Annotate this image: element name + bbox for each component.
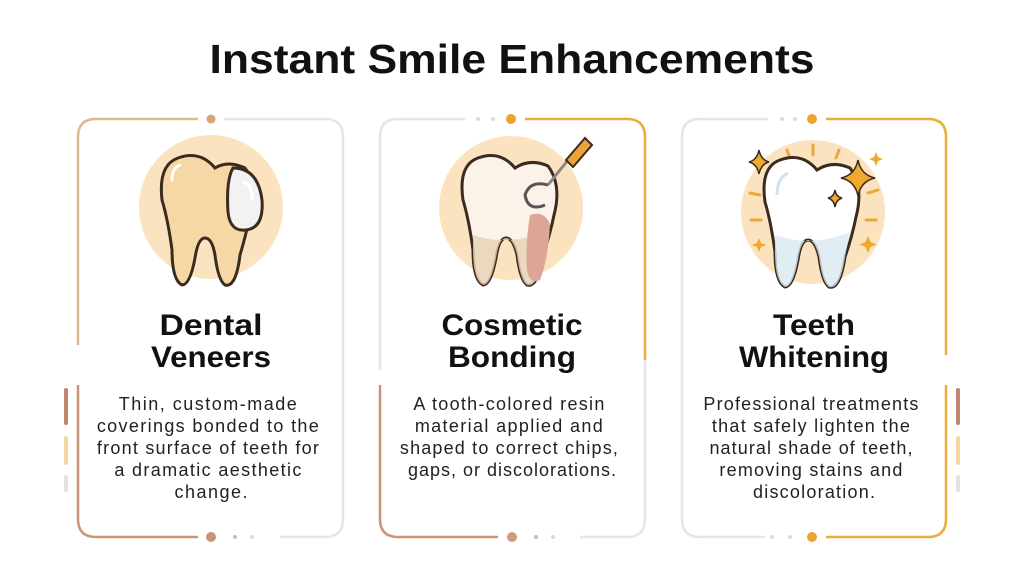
text block: bonding description: A tooth-colored resin (413, 394, 604, 414)
heading: teeth whitening: Teeth (773, 309, 855, 342)
text block: bonding description: material applied and (415, 416, 603, 436)
text block: whitening description: natural shade of teeth, (709, 438, 912, 458)
title: Instant Smile Enhancements (210, 36, 814, 82)
panel: dental veneers: Veneers (151, 341, 271, 374)
text block: bonding description: shaped to correct chips, (400, 438, 618, 458)
icon: tooth with veneer (139, 135, 283, 285)
text block: whitening description: discoloration. (753, 482, 875, 502)
panel: cosmetic bonding: Bonding (448, 341, 576, 374)
text block: veneers description: front surface of teeth for (97, 438, 319, 458)
icon: tooth with bonding tool (439, 136, 592, 285)
panel: teeth whitening (682, 114, 960, 542)
text block: whitening description: removing stains and (719, 460, 902, 480)
text block: veneers description: change. (174, 482, 248, 502)
icon: sparkling tooth (741, 140, 885, 287)
panel: cosmetic bonding (380, 114, 645, 542)
heading: cosmetic bonding: Cosmetic (442, 309, 582, 342)
text block: whitening description: Professional treatments (703, 394, 918, 414)
text block: bonding description: gaps, or discolorations. (408, 460, 616, 480)
panel: dental veneers (64, 114, 343, 542)
panel: teeth whitening: Whitening (739, 341, 889, 374)
heading: dental veneers: Dental (160, 309, 262, 342)
text block: veneers description: coverings bonded to the (97, 416, 319, 436)
text block: veneers description: a dramatic aesthetic (114, 460, 301, 480)
text block: whitening description: that safely lighten the (712, 416, 910, 436)
text block: veneers description: Thin, custom-made (119, 394, 297, 414)
